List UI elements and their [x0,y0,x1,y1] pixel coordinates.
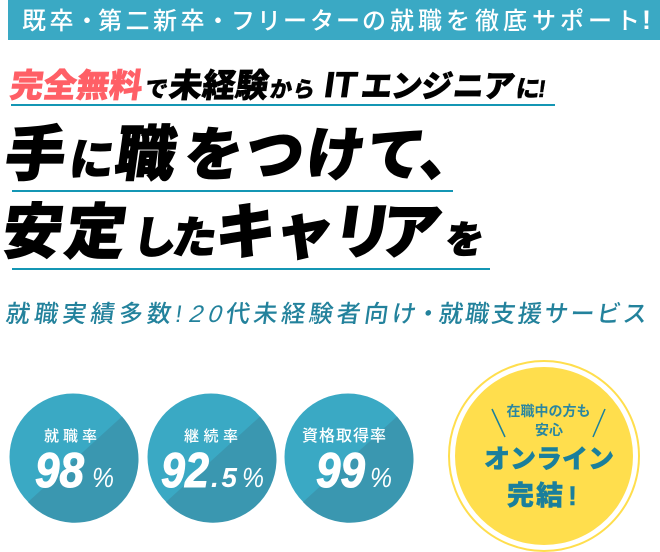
headline: free of charge: エンジニア [359,69,517,104]
subtitle: ・ [414,301,442,328]
online badge: 完結! [507,481,577,511]
main title line 1: に [67,136,117,185]
subtitle: 20 [187,301,225,328]
subtitle [4,301,649,328]
main title line 2 [0,198,490,270]
online badge: 在職中の方も [506,403,590,419]
stat badge: retention rate: 92 [161,444,209,498]
online badge: オンライン [484,444,614,474]
headline: free of charge: 完全無料 [8,68,145,105]
online badge: 安心 [535,422,563,438]
stat badge: employment rate [10,394,139,523]
stat badge: retention rate: 継続率 [184,427,238,445]
main title line 1 [1,120,484,192]
main title line 1: をつけて、 [180,123,483,188]
stat badge: certification rate: 資格取得率 [302,427,386,445]
stat badge: certification rate [284,394,414,523]
headline: free of charge [8,64,555,106]
stat badge: employment rate: 就職率 [44,428,97,445]
top banner: 既卒・第二新卒・フリーターの就職を徹底サポート [22,8,640,35]
headline: free of charge: に! [514,76,548,103]
stat badge: retention rate [148,394,277,523]
headline: free of charge: IT [322,64,360,105]
headline: free of charge: で [143,76,170,102]
main title line 2: した [130,214,220,263]
main title line 1: 職 [111,120,181,188]
headline: free of charge: 未経験 [167,68,271,105]
online badge [449,361,639,551]
main title line 2: を [443,219,487,262]
subtitle: 就職実績多数! [4,301,184,328]
stat badge: employment rate: % [92,462,114,493]
stat badge: retention rate: .5 [211,462,237,493]
main title line 2: キャリア [211,198,446,266]
stat badge: certification rate: % [370,462,392,493]
top banner [8,0,660,40]
top banner: ! [642,5,651,35]
stat badge: retention rate: % [242,462,264,493]
stat badge: employment rate: 98 [35,444,85,498]
headline: free of charge: から [268,77,317,102]
stat badge: certification rate: 99 [316,444,366,498]
subtitle: 代未経験者向け [224,301,418,328]
main title line 2: 安定 [0,198,131,266]
main title line 1: 手 [1,120,71,188]
subtitle: 就職支援サービス [437,301,649,328]
